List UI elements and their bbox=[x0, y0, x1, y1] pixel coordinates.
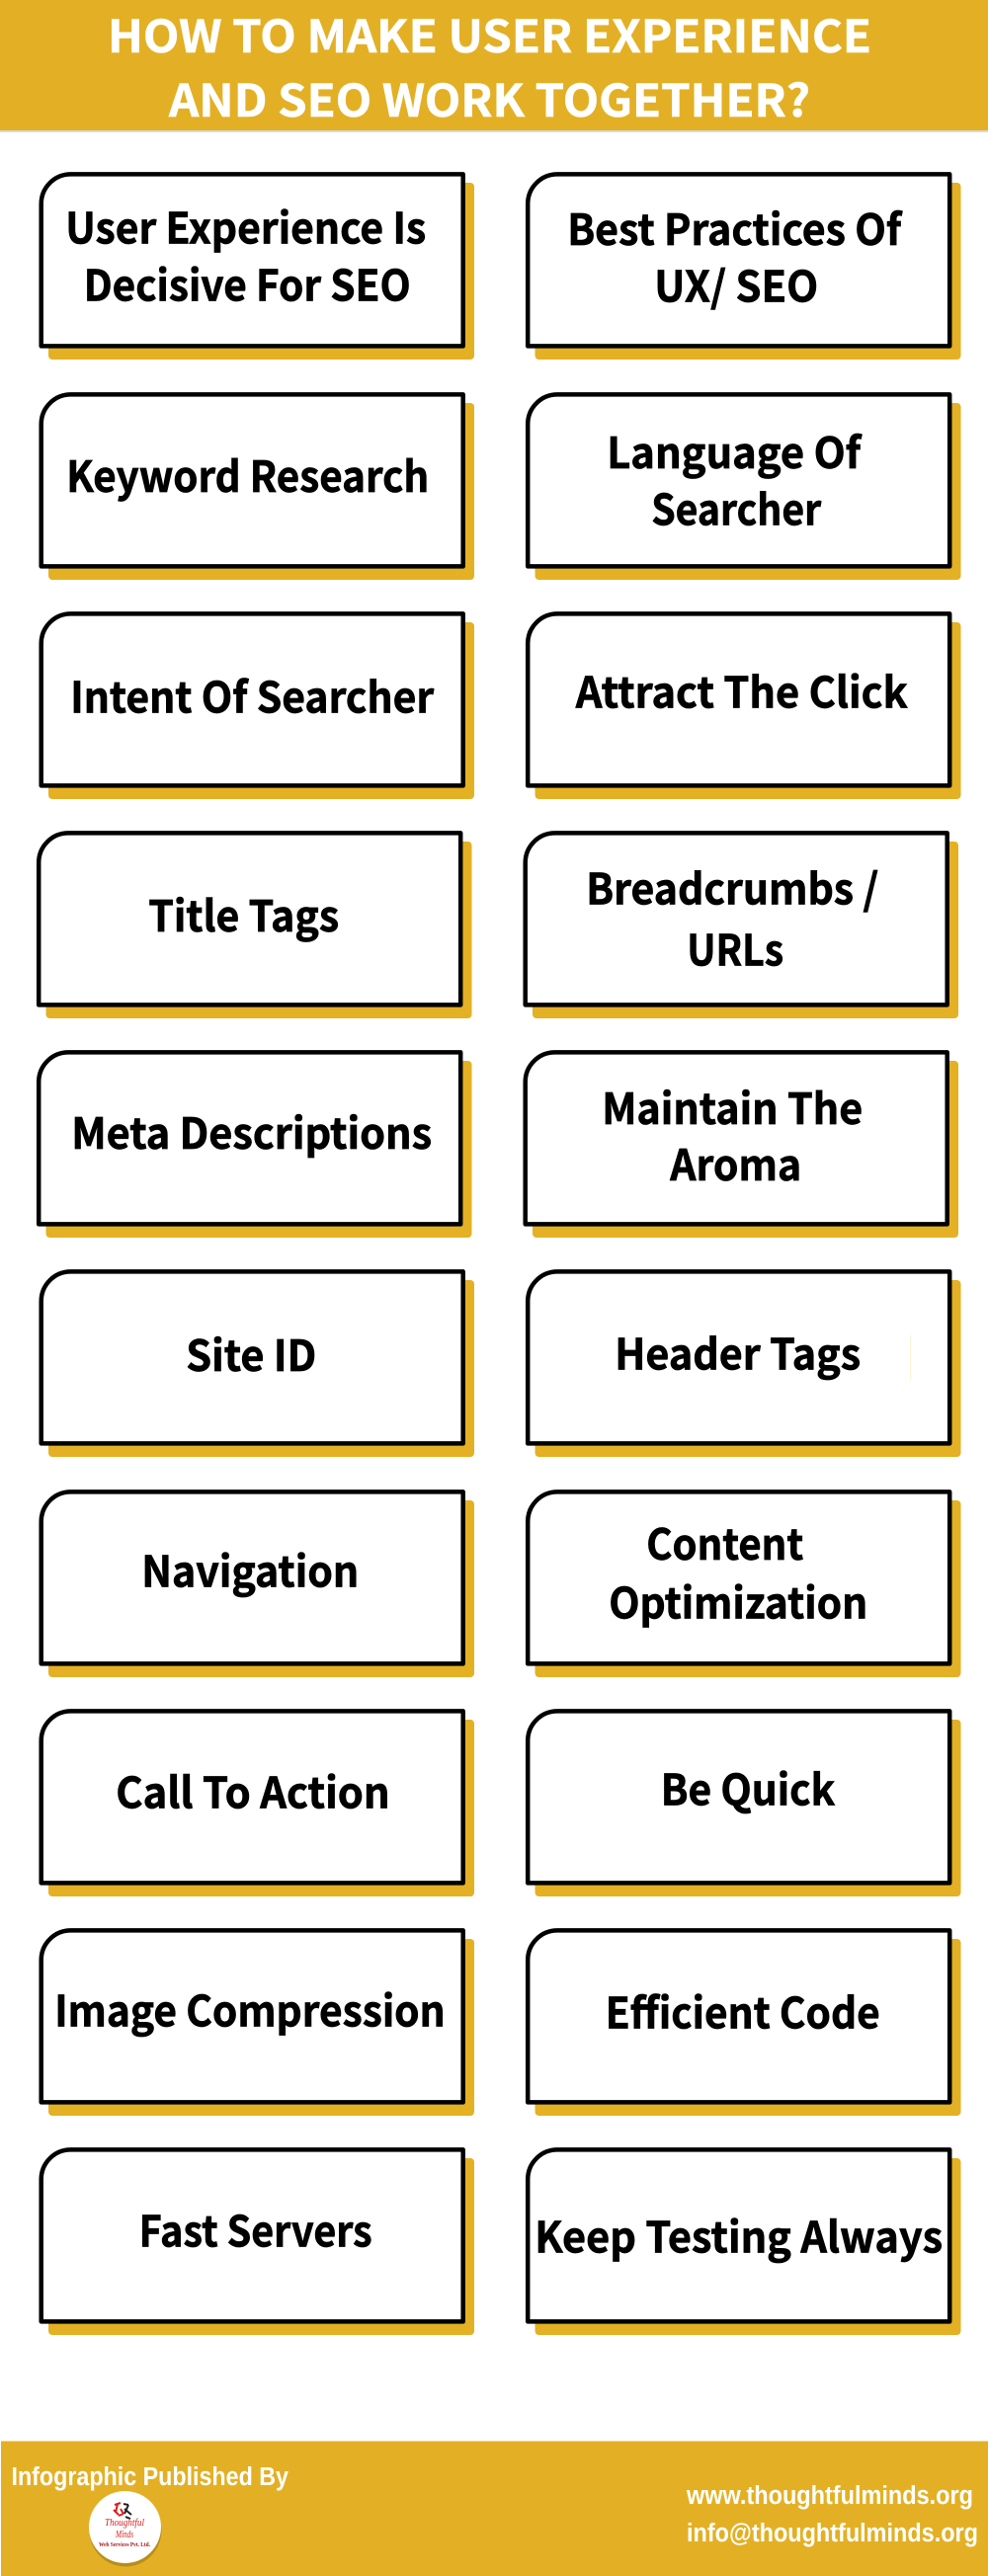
card label bbox=[65, 196, 426, 314]
card shadow bbox=[48, 2158, 474, 2335]
card box bbox=[39, 833, 460, 1005]
card shadow bbox=[48, 403, 474, 580]
card shadow bbox=[533, 842, 958, 1018]
card label bbox=[567, 197, 903, 314]
card: Meta Descriptions bbox=[39, 1052, 471, 1238]
card box bbox=[41, 1491, 463, 1663]
card shadow bbox=[535, 1500, 960, 1677]
card: Language Of Searcher bbox=[528, 394, 960, 580]
card shadow bbox=[535, 183, 960, 360]
card shadow bbox=[48, 183, 474, 360]
card: Title Tags bbox=[39, 833, 471, 1018]
card: Fast Servers bbox=[41, 2149, 474, 2335]
card label: UX/ SEO bbox=[654, 253, 818, 314]
card: Efficient Code bbox=[528, 1930, 960, 2116]
card label: Image Compression bbox=[54, 1977, 446, 2039]
card shadow bbox=[535, 1720, 960, 1896]
card label: Keep Testing Always bbox=[535, 2205, 943, 2266]
logo badge bbox=[89, 2491, 162, 2566]
card label: Content bbox=[646, 1511, 803, 1572]
card shadow bbox=[48, 1720, 474, 1896]
card box bbox=[528, 174, 949, 346]
title: AND SEO WORK TOGETHER? bbox=[168, 65, 810, 129]
card box bbox=[526, 1052, 947, 1224]
card: Attract The Click bbox=[528, 613, 960, 799]
card label: Intent Of Searcher bbox=[70, 664, 434, 725]
card label: Decisive For SEO bbox=[84, 253, 411, 314]
card label: Maintain The bbox=[602, 1076, 863, 1137]
card label bbox=[586, 855, 878, 978]
card shadow bbox=[45, 1061, 472, 1238]
logo text: Web Services Pvt. Ltd. bbox=[99, 2541, 150, 2548]
card box bbox=[41, 1711, 463, 1883]
card box bbox=[528, 394, 949, 566]
card shadow bbox=[535, 622, 960, 799]
card box bbox=[528, 1271, 949, 1443]
card label: Searcher bbox=[651, 476, 821, 537]
header banner bbox=[0, 0, 988, 132]
title: HOW TO MAKE USER EXPERIENCE bbox=[108, 1, 871, 65]
card box bbox=[41, 174, 463, 346]
logo text: Minds bbox=[115, 2529, 133, 2540]
card shadow bbox=[535, 1939, 960, 2116]
card shadow bbox=[45, 842, 472, 1018]
card label: Call To Action bbox=[116, 1760, 390, 1821]
card label: URLs bbox=[687, 917, 783, 978]
card: Site ID bbox=[41, 1271, 474, 1457]
card box bbox=[528, 1930, 949, 2102]
publisher credit: Infographic Published By bbox=[12, 2463, 289, 2491]
card label: User Experience Is bbox=[65, 196, 426, 257]
card: Maintain The Aroma bbox=[526, 1052, 958, 1238]
card: Keep Testing Always bbox=[528, 2149, 960, 2335]
card shadow bbox=[535, 1280, 960, 1457]
card box bbox=[528, 1491, 949, 1663]
card box bbox=[528, 1711, 949, 1883]
card: User Experience Is Decisive For SEO bbox=[41, 174, 474, 360]
card shadow bbox=[533, 1061, 958, 1238]
card box bbox=[41, 2149, 463, 2321]
card label: Language Of bbox=[607, 420, 863, 481]
footer bbox=[1, 2441, 988, 2576]
card shadow bbox=[48, 1939, 474, 2116]
card shadow bbox=[48, 1500, 474, 1677]
card box bbox=[41, 394, 463, 566]
card: Image Compression bbox=[41, 1930, 474, 2116]
title bbox=[108, 1, 871, 129]
card shadow bbox=[535, 403, 960, 580]
card shadow bbox=[535, 2158, 960, 2335]
card: Navigation bbox=[41, 1491, 474, 1677]
card box bbox=[528, 2149, 949, 2321]
card: Keyword Research bbox=[41, 394, 474, 580]
card label: Best Practices Of bbox=[567, 197, 903, 258]
card label: Attract The Click bbox=[575, 660, 908, 721]
logo mark bbox=[114, 2503, 131, 2519]
card label: Header Tags bbox=[615, 1322, 861, 1383]
card box bbox=[528, 613, 949, 785]
card label bbox=[609, 1511, 867, 1632]
card label: Efficient Code bbox=[606, 1979, 880, 2041]
card label: Aroma bbox=[669, 1132, 801, 1193]
card label: Site ID bbox=[186, 1323, 316, 1384]
card label: Optimization bbox=[609, 1570, 867, 1632]
logo text: Thoughtful bbox=[105, 2517, 144, 2529]
card box bbox=[39, 1052, 460, 1224]
card label: Navigation bbox=[141, 1539, 359, 1600]
card: Header Tags bbox=[528, 1271, 960, 1457]
card box bbox=[41, 1271, 463, 1443]
card: Call To Action bbox=[41, 1711, 474, 1896]
card: Breadcrumbs / URLs bbox=[526, 833, 958, 1018]
card shadow bbox=[48, 622, 474, 799]
card label: Keyword Research bbox=[66, 443, 429, 505]
card box bbox=[526, 833, 947, 1005]
card label: Meta Descriptions bbox=[71, 1100, 432, 1162]
card shadow bbox=[48, 1280, 474, 1457]
card box bbox=[41, 1930, 463, 2102]
card label bbox=[602, 1076, 863, 1193]
card: Intent Of Searcher bbox=[41, 613, 474, 799]
card: Best Practices Of UX/ SEO bbox=[528, 174, 960, 360]
card label: Fast Servers bbox=[139, 2199, 372, 2260]
card label: Title Tags bbox=[148, 883, 339, 944]
card: Be Quick bbox=[528, 1711, 960, 1896]
card box bbox=[41, 613, 463, 785]
card label bbox=[607, 420, 863, 537]
card label: Breadcrumbs / bbox=[586, 855, 878, 917]
card label: Be Quick bbox=[661, 1756, 835, 1817]
card: Content Optimization bbox=[528, 1491, 960, 1677]
logo text bbox=[99, 2517, 150, 2548]
